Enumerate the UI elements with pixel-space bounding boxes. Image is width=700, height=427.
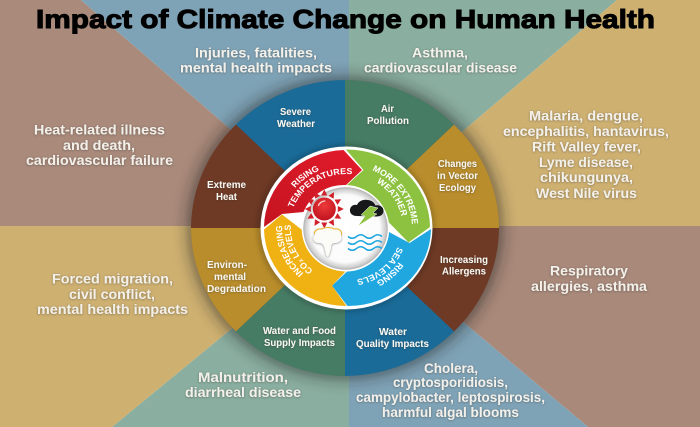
label: water and food (263, 326, 336, 349)
label: air pollution impacts (364, 46, 517, 76)
label: water quality impacts: Cholera, (424, 361, 478, 376)
label: severe weather: Weather (277, 119, 315, 130)
label: extreme heat impacts (26, 123, 173, 168)
arrow: rising sea levels (332, 229, 431, 306)
wheel sector labels (207, 104, 488, 350)
arrow: increasing CO2 levels (264, 214, 346, 306)
label: water quality: Quality Impacts (356, 339, 429, 350)
label: extreme heat impacts: cardiovascular failure (26, 153, 173, 168)
label: vector ecology: Changes (438, 159, 477, 170)
icon: sea waves (348, 235, 382, 250)
sector: severe weather (236, 80, 345, 228)
label: food supply impacts (185, 370, 301, 400)
label: environmental degradation impacts: civil conflict, (69, 287, 155, 302)
label: food supply impacts: Malnutrition, (198, 370, 288, 385)
label: water quality: Water (379, 327, 407, 338)
label: air pollution impacts: Asthma, (412, 46, 468, 60)
sector: increasing allergens (345, 228, 499, 331)
label: extreme heat impacts: and death, (63, 138, 135, 153)
label: vector ecology: Ecology (439, 183, 476, 194)
arrow: increasing CO2 levels: CO₂ LEVELS (284, 225, 312, 274)
label: severe weather impacts: mental health impacts (180, 61, 332, 76)
label: severe weather impacts: Injuries, fatalities, (195, 46, 317, 60)
label: air pollution: Pollution (367, 116, 409, 127)
label: vector ecology impacts: chikungunya, (540, 170, 633, 185)
icon: storm cloud with lightning (350, 200, 384, 226)
arrow: rising temperatures: TEMPERATURES (288, 168, 352, 206)
icon: sun (305, 190, 344, 228)
label: increasing allergens (440, 255, 488, 278)
arrow: rising temperatures (264, 150, 362, 227)
outer wheel sectors (191, 80, 499, 376)
label: extreme heat (207, 180, 246, 203)
label: allergen impacts (531, 264, 647, 294)
label: environmental degradation impacts: mental health impacts (37, 302, 188, 317)
label: environmental degradation: Environ- (207, 260, 247, 271)
center ring shadow (258, 145, 434, 311)
center white ring (260, 146, 432, 310)
label: extreme heat: Extreme (207, 180, 246, 191)
label: food supply impacts: diarrheal disease (185, 385, 301, 400)
label: environmental degradation impacts (37, 272, 188, 317)
label: allergen impacts: Respiratory (550, 264, 628, 279)
label: vector ecology (437, 159, 478, 194)
label: extreme heat impacts: Heat-related illness (34, 123, 165, 138)
label: environmental degradation: mental (214, 272, 246, 283)
icon: mushroom cloud (313, 228, 342, 257)
label: vector ecology impacts (503, 109, 669, 201)
sector: air pollution (345, 80, 454, 228)
label: environmental degradation: Degradation (207, 284, 266, 295)
label: vector ecology impacts: Malaria, dengue, (529, 109, 643, 124)
label: water quality impacts: harmful algal blooms (382, 405, 519, 420)
label: severe weather impacts (180, 46, 332, 76)
sector: water and food supply (236, 228, 345, 376)
label: air pollution (367, 104, 409, 127)
label: vector ecology impacts: West Nile virus (536, 186, 637, 201)
label: water and food: Supply Impacts (264, 338, 335, 349)
label: increasing allergens: Allergens (442, 266, 486, 278)
arrow: more extreme weather (346, 150, 430, 242)
arrow: rising temperatures: RISING (290, 166, 318, 188)
label: vector ecology impacts: Rift Valley fever, (532, 140, 641, 155)
wheel drop shadow (189, 78, 501, 378)
title: Impact of Climate Change on Human Health (36, 4, 655, 34)
label: allergen impacts: allergies, asthma (531, 279, 647, 294)
label: environmental degradation (207, 260, 266, 295)
arrow: more extreme weather: WEATHER (378, 178, 407, 216)
arrow: rising sea levels: RISING (377, 262, 404, 286)
label: vector ecology impacts: encephalitis, hantavirus, (503, 124, 669, 139)
sector: water quality (345, 228, 454, 376)
label: severe weather: Severe (280, 107, 311, 118)
label: vector ecology: in Vector (437, 171, 478, 182)
center hub (302, 186, 388, 270)
label: water quality (356, 327, 429, 350)
label: vector ecology impacts: Lyme disease, (539, 155, 633, 170)
sector: environmental degradation (191, 228, 345, 331)
label: air pollution: Air (381, 104, 394, 115)
sector: changes in vector ecology (345, 125, 499, 228)
label: water quality impacts: campylobacter, leptospirosis, (356, 390, 545, 405)
label: increasing allergens: Increasing (440, 255, 488, 266)
arrow: rising sea levels: SEA LEVELS (357, 248, 402, 285)
arrow: more extreme weather: MORE EXTREME (372, 165, 418, 224)
label: environmental degradation impacts: Forced migration, (52, 272, 173, 287)
label: extreme heat: Heat (216, 192, 237, 203)
label: air pollution impacts: cardiovascular disease (364, 61, 517, 76)
label: severe weather (277, 107, 315, 130)
sector: extreme heat (191, 125, 345, 228)
arrow: increasing CO2 levels: INCREASING (276, 226, 304, 278)
label: water quality impacts: cryptosporidiosis, (393, 375, 508, 390)
label: water quality impacts (356, 361, 545, 420)
label: water and food: Water and Food (263, 326, 336, 337)
